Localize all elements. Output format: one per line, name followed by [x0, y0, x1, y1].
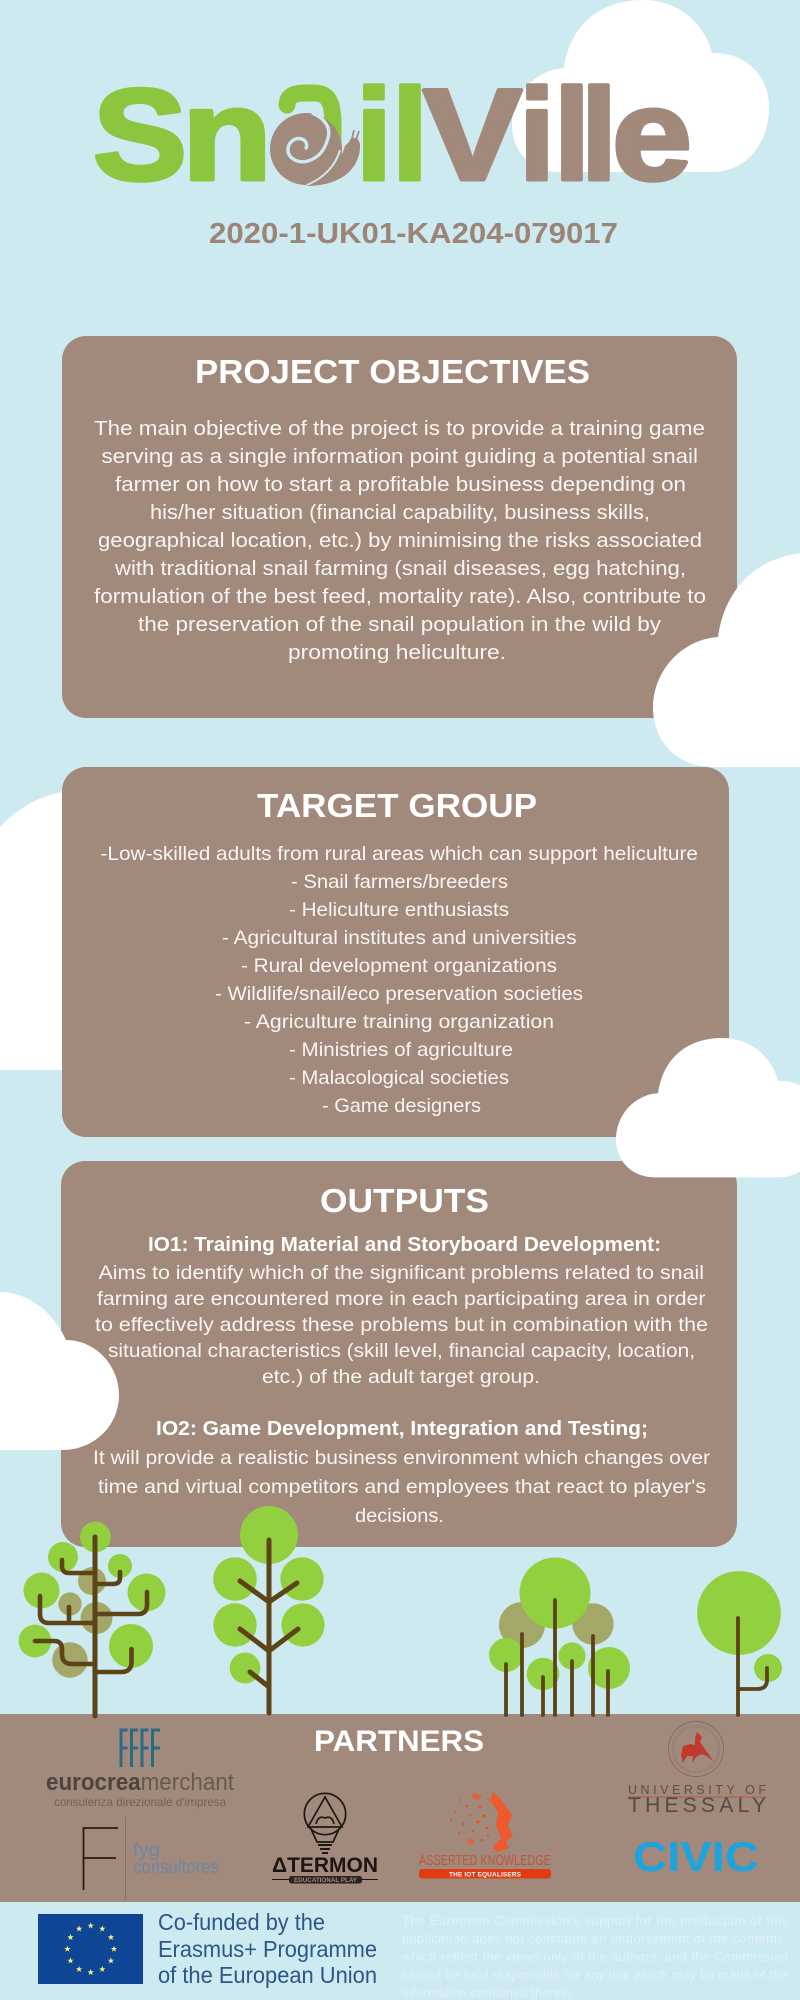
text: objectives body: promoting heliculture. — [288, 641, 506, 664]
text: target group list — [100, 843, 698, 1117]
tree 2 — [213, 1506, 325, 1713]
logo text: Snail: n — [182, 62, 272, 208]
text: IO1: Aims to identify which of the significant problems related to snail — [98, 1262, 704, 1284]
logo: eurocrea merchant — [46, 1730, 234, 1809]
logo: fyg consultores: consultores — [133, 1857, 219, 1877]
panel: outputs — [61, 1161, 737, 1547]
logo: atermon: ΔTERMON — [272, 1853, 378, 1877]
panel: target group — [62, 767, 729, 1137]
text: target group list: -Low-skilled adults from rural areas which can support heliculture — [100, 843, 698, 865]
logo text: Snail: i — [356, 62, 392, 208]
text: target group list: - Agricultural institutes and universities — [222, 927, 577, 949]
logo text: Ville: l — [554, 62, 590, 208]
heading: partners: PARTNERS — [314, 1725, 484, 1758]
cloud: overlapping target group — [616, 1038, 800, 1177]
text: disclaimer: which reflect the views only of the authors, and the Commission — [401, 1950, 788, 1964]
logo: asserted knowledge — [419, 1792, 551, 1878]
text: IO1: farming are encountered more in each participating area in order — [97, 1288, 706, 1310]
panel: project objectives — [62, 336, 737, 718]
band: partners — [0, 1714, 800, 1902]
text: target group list: - Agriculture training organization — [244, 1011, 554, 1033]
logo: asserted knowledge: THE IOT EQUALISERS — [449, 1872, 522, 1878]
text: objectives body: with traditional snail farming (snail diseases, egg hatching, — [114, 557, 686, 580]
logo: SnailVille — [93, 62, 692, 208]
logo: civic: CIVIC — [633, 1833, 759, 1880]
text: target group list: - Heliculture enthusiasts — [289, 899, 509, 921]
logo text: Snail: l — [392, 62, 428, 208]
logo text: Ville: e — [612, 62, 692, 208]
text: disclaimer: information contained therein. — [402, 1986, 575, 2000]
text: disclaimer: cannot be held responsible for any use which may be made of the — [402, 1968, 788, 1982]
text: IO1: to effectively address these problems but in combination with the — [95, 1314, 708, 1336]
text: co-funded by Erasmus+: Erasmus+ Programme — [158, 1936, 377, 1962]
heading: project objectives: PROJECT OBJECTIVES — [195, 353, 590, 390]
text: objectives body: serving as a single information point guiding a potential snail — [102, 445, 698, 468]
text: IO2 — [93, 1418, 711, 1527]
text: target group list: - Ministries of agriculture — [289, 1039, 513, 1061]
cloud: right of objectives — [653, 552, 800, 767]
text: objectives body: the preservation of the snail population in the wild by — [138, 613, 662, 636]
text: objectives body: farmer on how to start a profitable business depending on — [115, 473, 686, 496]
text: target group list: - Malacological societies — [289, 1067, 509, 1089]
text: disclaimer: publication does not constitute an endorsement of the contents, — [402, 1932, 788, 1946]
logo: eurocrea merchant: consulenza direzionale d'impresa — [54, 1795, 226, 1809]
text: objectives body — [94, 417, 706, 664]
tree 4 — [697, 1571, 782, 1715]
logo: atermon — [272, 1793, 378, 1884]
logo text: Snail — [93, 62, 428, 208]
cloud: overlapping outputs — [0, 1292, 119, 1450]
text: disclaimer: The European Commission's support for the production of this — [402, 1914, 788, 1928]
text: IO1: situational characteristics (skill level, financial capacity, location, — [108, 1340, 695, 1362]
icon: eurocrea mark — [121, 1730, 160, 1767]
logo: university of thessaly: UNIVERSITY OF — [628, 1783, 766, 1797]
logo text: Ville: l — [581, 62, 617, 208]
project code: 2020-1-UK01-KA204-079017 — [209, 218, 618, 250]
text: objectives body: geographical location, etc.) by minimising the risks associated — [98, 529, 702, 552]
text: objectives body: The main objective of the project is to provide a training game — [94, 417, 705, 440]
text: IO1: IO1: Training Material and Storyboard Development: — [148, 1234, 661, 1256]
text: target group list: - Rural development organizations — [241, 955, 557, 977]
text: IO1 — [95, 1234, 708, 1388]
text: IO1: etc.) of the adult target group. — [262, 1366, 540, 1388]
heading: outputs: OUTPUTS — [320, 1182, 489, 1219]
tree group 3 — [489, 1558, 630, 1715]
logo: eurocrea merchant: eurocreamerchant — [46, 1769, 234, 1796]
text: target group list: - Game designers — [322, 1095, 481, 1117]
logo: fyg consultores: fyg — [133, 1840, 160, 1861]
tree 1 — [19, 1522, 165, 1716]
logo text: Ville — [423, 62, 692, 208]
logo text: Ville: i — [519, 62, 555, 208]
logo text: Snail: S — [93, 62, 187, 208]
text: co-funded by Erasmus+ — [158, 1909, 377, 1988]
text: IO2: It will provide a realistic business environment which changes over — [93, 1447, 711, 1469]
logo: university of thessaly: THESSALY — [628, 1794, 766, 1817]
cloud: left of target group — [0, 792, 80, 1070]
text: objectives body: formulation of the best feed, mortality rate). Also, contribute to — [94, 585, 706, 608]
text: objectives body: his/her situation (financial capability, business skills, — [150, 501, 650, 524]
text: IO2: time and virtual competitors and employees that react to player's — [98, 1476, 706, 1498]
logo text: Ville: V — [423, 62, 522, 208]
text: co-funded by Erasmus+: of the European Union — [158, 1962, 377, 1988]
icon: EU flag — [38, 1914, 143, 1984]
text: IO2: decisions. — [355, 1505, 444, 1527]
text: disclaimer — [401, 1914, 788, 2000]
text: target group list: - Wildlife/snail/eco preservation societies — [215, 983, 583, 1005]
text: co-funded by Erasmus+: Co-funded by the — [158, 1909, 325, 1935]
text: target group list: - Snail farmers/breeders — [291, 871, 508, 893]
heading: target group: TARGET GROUP — [257, 787, 537, 824]
logo: atermon: EDUCATIONAL PLAY — [294, 1877, 358, 1884]
icon: snail — [270, 113, 360, 186]
logo letter a: green hook — [287, 93, 333, 140]
logo: asserted knowledge: ASSERTED KNOWLEDGE — [419, 1852, 551, 1869]
cloud: top right — [512, 0, 769, 172]
logo: fyg consultores — [84, 1817, 219, 1899]
logo: university of thessaly — [628, 1722, 766, 1817]
text: IO2: IO2: Game Development, Integration and Testing; — [156, 1418, 648, 1440]
